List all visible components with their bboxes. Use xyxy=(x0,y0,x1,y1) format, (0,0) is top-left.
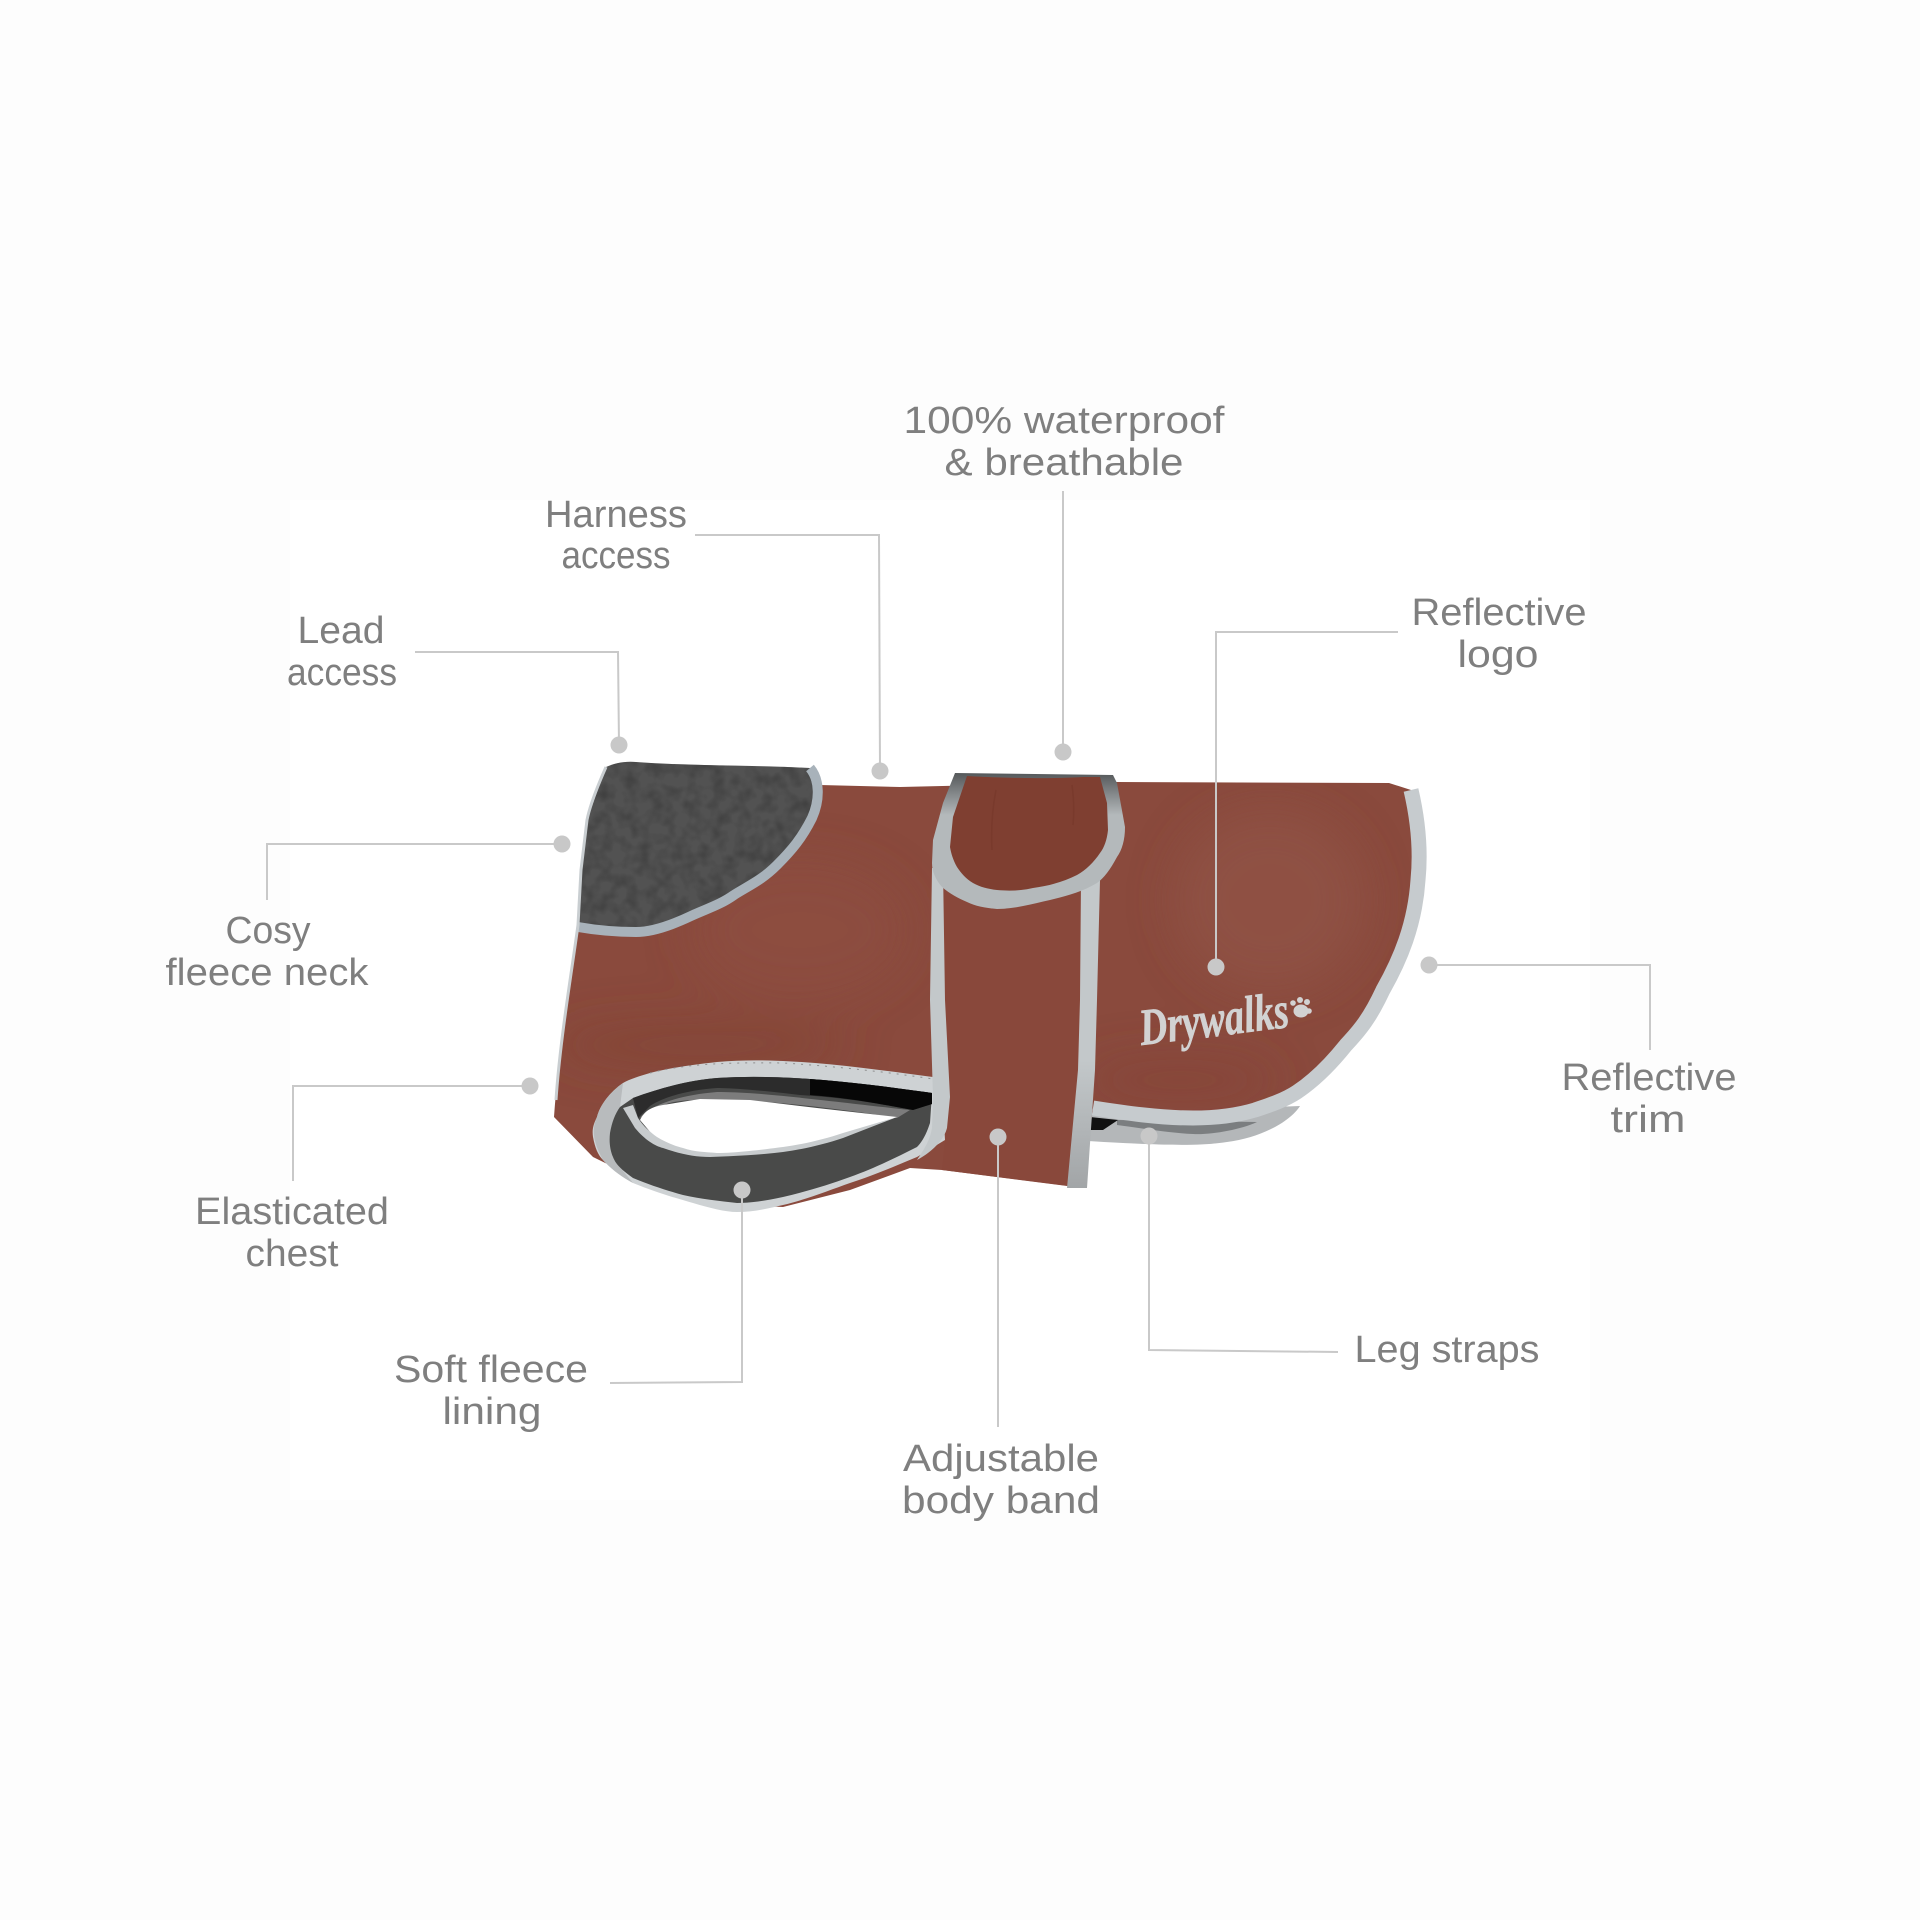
coat body xyxy=(554,780,1419,1207)
callout: Lead access: Lead xyxy=(298,610,384,652)
leg strap behind coat xyxy=(1088,1106,1300,1145)
callout: Elasticated chest: chest xyxy=(246,1233,339,1275)
callout: Adjustable body band: Adjustable xyxy=(903,1438,1099,1480)
callout: Elasticated chest: Elasticated xyxy=(195,1191,389,1233)
callout: 100% waterproof & breathable: 100% waterproof xyxy=(904,400,1225,442)
callout: Adjustable body band: body band xyxy=(902,1480,1100,1522)
callout: Reflective logo: logo xyxy=(1458,634,1538,676)
callout: Reflective trim: Reflective xyxy=(1562,1057,1736,1099)
callout: Leg straps: Leg straps xyxy=(1354,1329,1540,1371)
callout: Cosy fleece neck xyxy=(166,836,570,994)
callout: Reflective trim: trim xyxy=(1610,1099,1686,1141)
reflective Drywalks logo: Drywalks xyxy=(1135,982,1292,1057)
inner hole trim xyxy=(623,1105,897,1157)
callout: Cosy fleece neck: fleece neck xyxy=(166,952,370,994)
callout: Reflective trim xyxy=(1420,956,1736,1141)
callout: Soft fleece lining xyxy=(394,1182,750,1433)
icon: paw print xyxy=(1290,997,1312,1018)
coat reflective trim xyxy=(1093,790,1419,1118)
callout: Lead access xyxy=(287,610,628,754)
band flap xyxy=(932,773,1125,909)
callout: Harness access xyxy=(545,494,888,780)
adjustable body band xyxy=(917,860,1100,1188)
callout: Harness access: access xyxy=(562,535,670,577)
callout: Adjustable body band xyxy=(902,1128,1100,1522)
grey inner band xyxy=(640,1092,910,1118)
callout: Harness access: Harness xyxy=(545,494,687,536)
dog coat illustration xyxy=(550,762,1419,1212)
callout: Leg straps xyxy=(1140,1128,1540,1371)
black upper strip xyxy=(633,1077,932,1118)
fleece lining xyxy=(610,1077,932,1203)
callout: 100% waterproof & breathable xyxy=(904,400,1225,760)
cosy fleece neck xyxy=(556,762,818,1100)
elasticated chest and fleece lining xyxy=(593,1060,945,1212)
callout: Soft fleece lining: lining xyxy=(442,1391,542,1433)
callout: Elasticated chest xyxy=(195,1078,538,1275)
chest leg hole xyxy=(640,1099,897,1156)
callout: Reflective logo: Reflective xyxy=(1412,592,1586,634)
fabric shading xyxy=(550,810,1365,1102)
callout: 100% waterproof & breathable: & breathable xyxy=(944,442,1184,484)
callout: Cosy fleece neck: Cosy xyxy=(226,910,310,952)
callout: Reflective logo xyxy=(1208,592,1586,976)
chest trim xyxy=(593,1060,945,1212)
callout: Soft fleece lining: Soft fleece xyxy=(394,1349,588,1391)
callout: Lead access: access xyxy=(287,652,397,694)
